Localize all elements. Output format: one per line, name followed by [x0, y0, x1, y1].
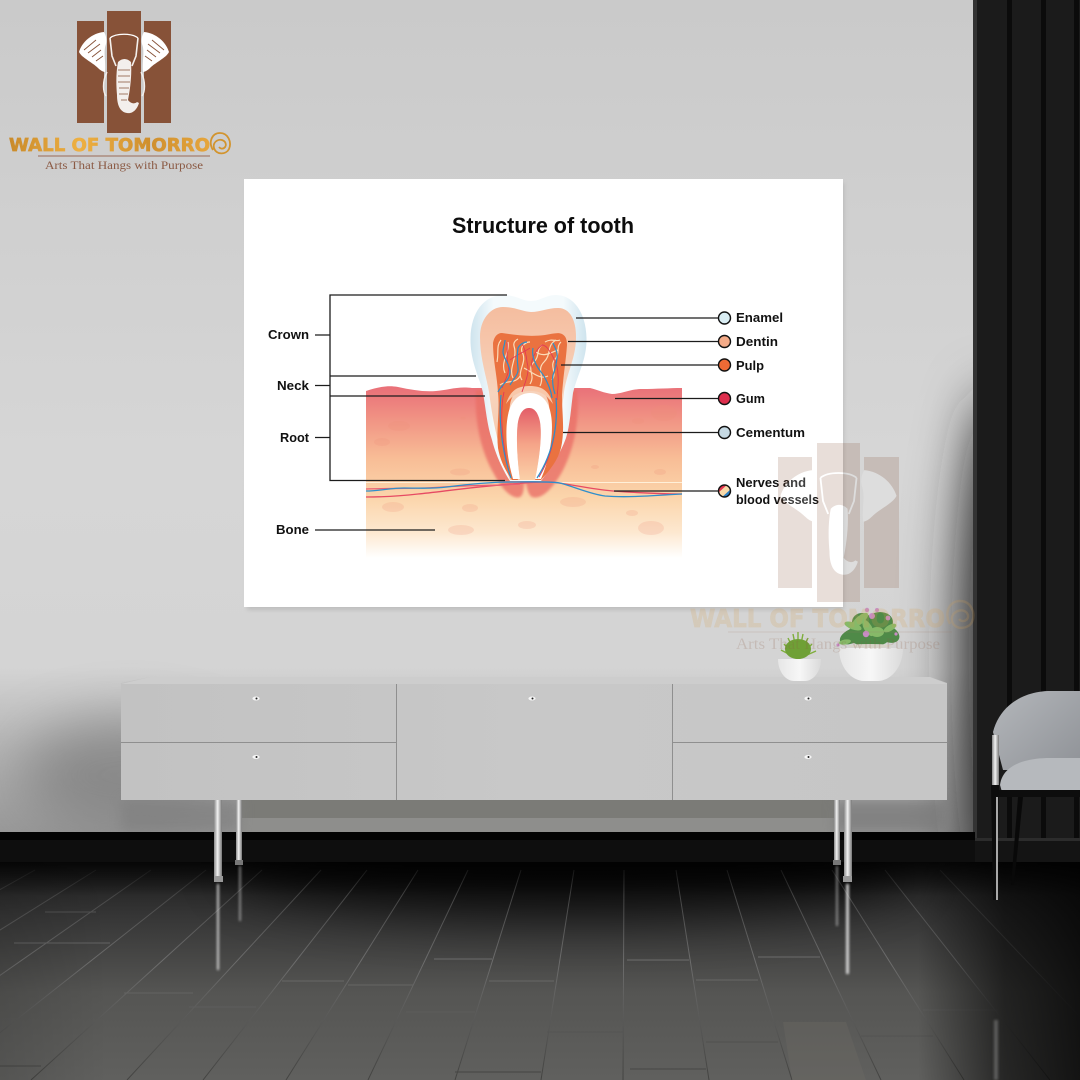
nerves and blood vessels — [366, 482, 682, 497]
legend: Enamel: Enamel — [736, 310, 783, 325]
chair — [991, 691, 1080, 900]
gum core between roots — [517, 408, 541, 480]
enamel — [470, 295, 587, 481]
legend: Pulp — [718, 358, 764, 373]
watermark wordmark: Arts That Hangs with Purpose — [736, 636, 940, 653]
legend: Gum: Gum — [736, 391, 765, 406]
logo wordmark: WALL OF TOMORRO — [9, 135, 210, 156]
legend: Gum — [718, 391, 765, 406]
gum shadow around root — [476, 390, 578, 497]
left bracket lines — [315, 295, 507, 530]
wood floor — [0, 862, 1080, 1080]
watermark wordmark — [690, 601, 973, 653]
skirting board — [0, 832, 975, 862]
legend: Pulp: Pulp — [736, 358, 764, 373]
small potted plant — [778, 632, 821, 681]
wall — [0, 377, 973, 832]
legend: Nerves and blood vessels — [718, 478, 818, 504]
watermark logo — [778, 443, 899, 602]
label: Root: Root — [280, 430, 310, 445]
dentin highlight around root canal — [506, 386, 553, 404]
logo: Wall of Tomorrow — [9, 11, 230, 172]
gum and bone block — [366, 386, 682, 558]
white inner root — [506, 393, 552, 479]
dark wood wall panelling — [973, 0, 1080, 868]
dentin — [480, 307, 576, 480]
canvas print panel — [244, 179, 844, 610]
legend: Nerves and blood vessels: Nerves and — [736, 475, 806, 490]
legend: Dentin: Dentin — [736, 334, 778, 349]
right leader lines — [561, 318, 718, 491]
label: Crown: Crown — [268, 327, 309, 342]
logo tagline: Arts That Hangs with Purpose — [45, 158, 203, 172]
icon: elephant head — [79, 32, 169, 113]
label: Neck: Neck — [277, 378, 310, 393]
pulp nerve fibres — [497, 339, 561, 386]
logo swirl — [211, 133, 230, 153]
pulp — [493, 333, 567, 480]
watermark elephant — [780, 470, 897, 575]
large potted plant with flowers — [836, 608, 903, 681]
legend: Nerves and blood vessels: blood vessels — [736, 492, 819, 507]
sideboard cabinet — [121, 677, 947, 800]
label: Bone: Bone — [276, 522, 309, 537]
title: Structure of tooth — [452, 213, 634, 238]
tooth — [470, 295, 587, 481]
sideboard legs — [214, 800, 852, 882]
legend: Dentin — [718, 334, 778, 349]
legend: Cementum: Cementum — [736, 425, 805, 440]
watermark wordmark: WALL OF TOMORRO — [690, 604, 945, 633]
